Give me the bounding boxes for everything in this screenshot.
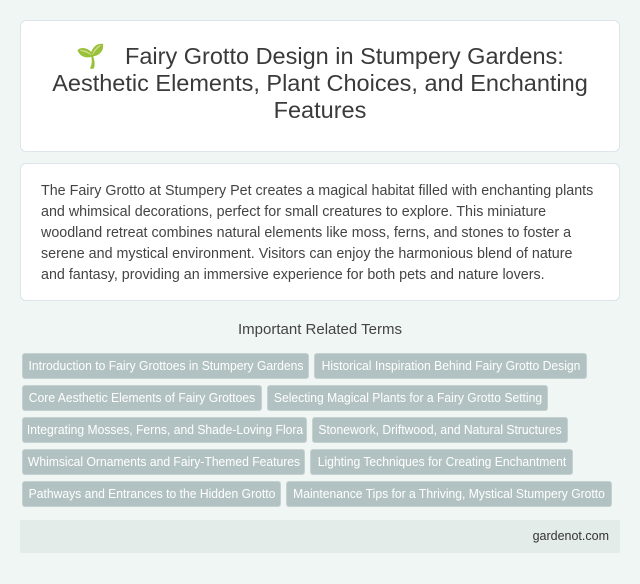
footer	[20, 520, 620, 553]
tag	[23, 354, 308, 378]
title: Features	[274, 97, 366, 123]
tag: Stonework, Driftwood, and Natural Structures	[318, 423, 562, 437]
tag: Core Aesthetic Elements of Fairy Grottoes	[29, 391, 255, 405]
tag: Historical Inspiration Behind Fairy Grotto Design	[321, 359, 580, 373]
title: Aesthetic Elements, Plant Choices, and Enchanting	[52, 70, 588, 96]
description card	[20, 163, 620, 301]
tag	[23, 450, 304, 474]
tag: Selecting Magical Plants for a Fairy Grotto Setting	[273, 391, 542, 405]
tag	[23, 386, 261, 410]
title: 🌱 Fairy Grotto Design in Stumpery Gardens:	[76, 43, 564, 69]
tag: Integrating Mosses, Ferns, and Shade-Loving Flora	[26, 423, 303, 437]
tag: Whimsical Ornaments and Fairy-Themed Features	[27, 455, 300, 469]
tag: Introduction to Fairy Grottoes in Stumpery Gardens	[28, 359, 303, 373]
tag: Lighting Techniques for Creating Enchantment	[317, 455, 566, 469]
tag: Maintenance Tips for a Thriving, Mystical Stumpery Grotto	[293, 487, 605, 501]
description text: woodland retreat combines natural elements like moss, ferns, and stones to foster a	[41, 225, 571, 241]
tag	[23, 418, 306, 442]
tag	[268, 386, 547, 410]
description text: and fantasy, providing an immersive experience for both pets and nature lovers.	[41, 267, 545, 283]
footer text: gardenot.com	[533, 529, 609, 543]
tag	[311, 450, 572, 474]
description text: The Fairy Grotto at Stumpery Pet creates a magical habitat filled with enchanting plants	[41, 183, 593, 199]
description text	[41, 183, 593, 283]
tag	[23, 482, 280, 506]
title	[52, 43, 588, 123]
section heading: Important Related Terms	[238, 321, 402, 338]
description text: serene and mystical environment. Visitors can enjoy the harmonious blend of nature	[41, 246, 572, 262]
tag	[315, 354, 586, 378]
tag	[313, 418, 567, 442]
tag	[287, 482, 611, 506]
title card	[20, 20, 620, 152]
tag: Pathways and Entrances to the Hidden Grotto	[28, 487, 275, 501]
description text: and whimsical decorations, perfect for small creatures to explore. This miniature	[41, 204, 546, 220]
